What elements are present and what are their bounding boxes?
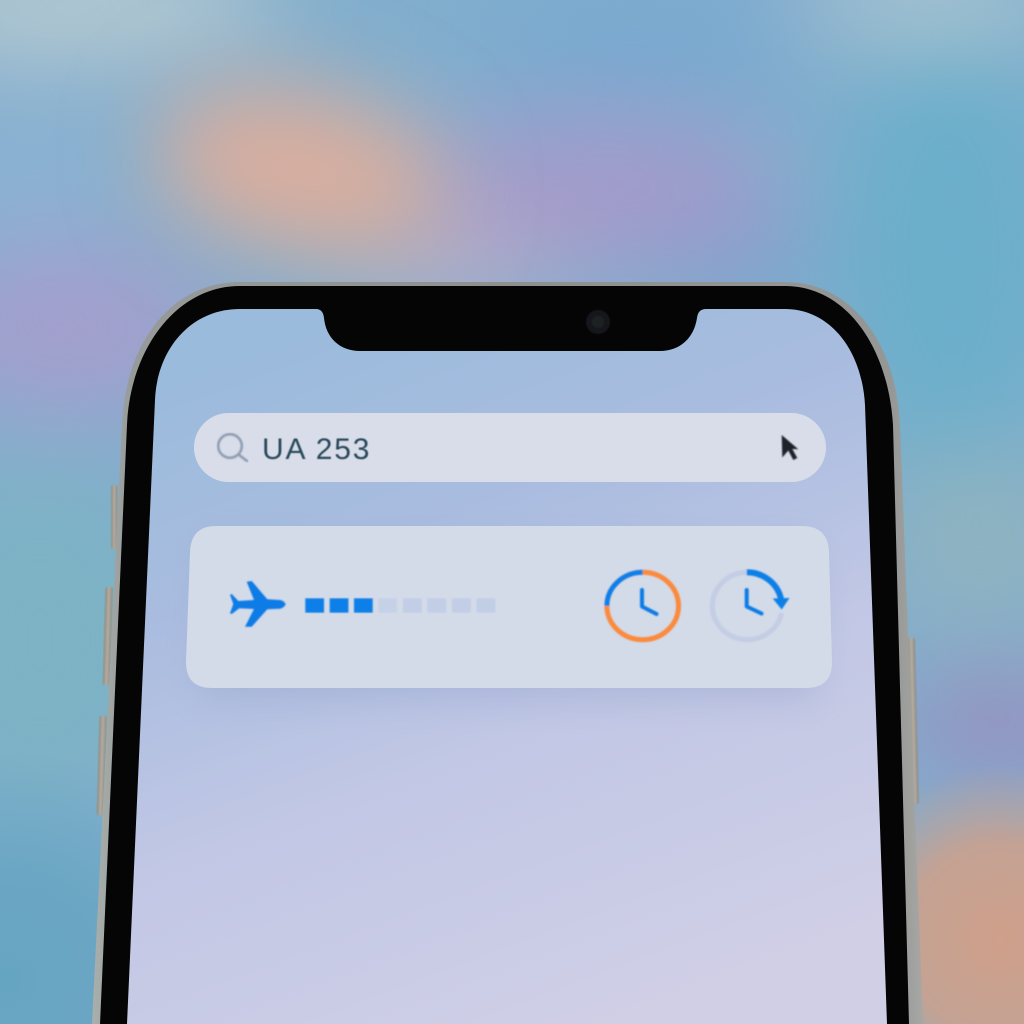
front camera bbox=[586, 310, 610, 334]
search text: UA 253 bbox=[262, 433, 371, 466]
icon: clock with refresh arrow bbox=[712, 572, 790, 640]
icon: clock with blue and orange ring bbox=[607, 572, 678, 640]
screen with notch bbox=[127, 309, 887, 1024]
side button: silent switch bbox=[111, 485, 118, 549]
side button: volume down bbox=[97, 716, 107, 815]
side button: power bbox=[907, 638, 919, 804]
side button: volume up bbox=[103, 587, 113, 685]
phone bbox=[92, 282, 923, 1024]
flight status card bbox=[186, 526, 832, 698]
card background bbox=[186, 526, 832, 688]
phone metal frame bbox=[92, 282, 923, 1024]
search bar bbox=[194, 413, 826, 482]
icon: cursor arrow bbox=[782, 435, 798, 460]
icon: airplane bbox=[230, 581, 286, 627]
card shadow bbox=[200, 545, 818, 698]
icon: magnifying glass bbox=[218, 434, 247, 461]
progress bar segments bbox=[305, 598, 495, 613]
phone black bezel bbox=[100, 286, 909, 1024]
